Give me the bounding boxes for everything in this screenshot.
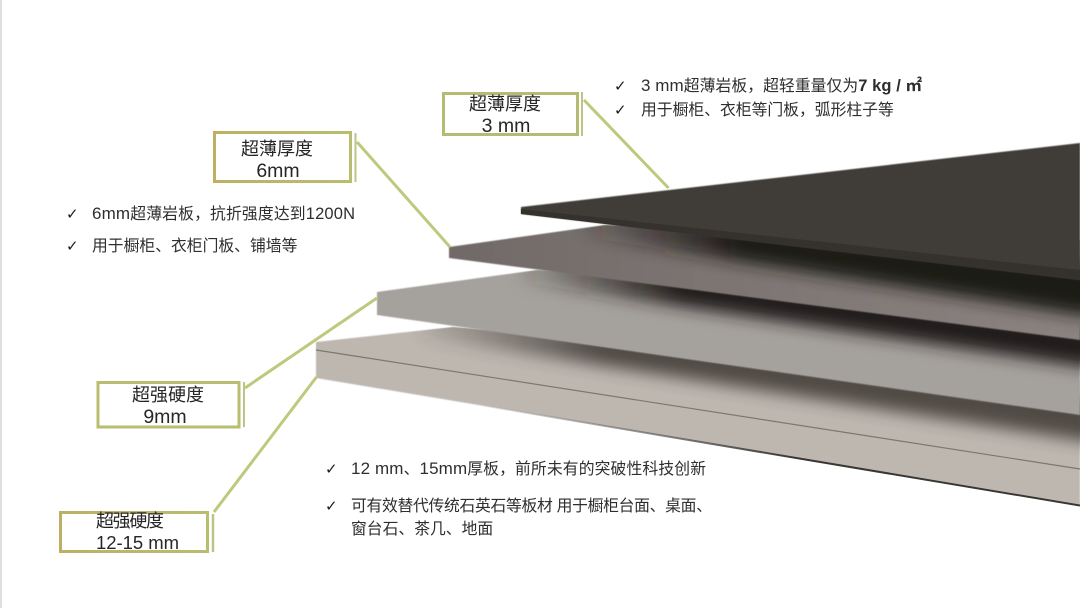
label: 6mm: 超薄厚度 — [241, 139, 313, 159]
label: 12-15 mm — [60, 511, 213, 553]
text block: 3 mm notes — [614, 76, 922, 119]
text block: 3 mm notes: ✓ — [614, 101, 627, 119]
label: 9mm: 超强硬度 — [132, 385, 204, 405]
slab illustration: four stacked panels — [316, 143, 1080, 506]
label: 12-15 mm: 超强硬度 — [96, 511, 164, 531]
label: 3 mm: 3 mm — [482, 115, 530, 137]
label: 12-15 mm: 12-15 mm — [96, 532, 179, 553]
text block: 12-15 mm notes: ✓ — [325, 497, 338, 515]
slab: 3 mm panel — [521, 143, 1080, 280]
text block: 6 mm notes: ✓ — [66, 205, 79, 223]
text block: 3 mm notes: 3 mm超薄岩板，超轻重量仅为7 kg / ㎡ — [641, 76, 922, 95]
text block: 3 mm notes: 用于橱柜、衣柜等门板，弧形柱子等 — [641, 101, 894, 119]
text block: 6 mm notes — [66, 204, 355, 255]
text block: 3 mm notes: ✓ — [614, 77, 627, 95]
callout line: 6 mm — [357, 142, 450, 247]
callout line: 9 mm — [245, 298, 377, 388]
text block: 12-15 mm notes: ✓ — [325, 460, 338, 478]
text block: 6 mm notes: 用于橱柜、衣柜门板、铺墙等 — [92, 237, 298, 255]
text block: 12-15 mm notes: 12 mm、15mm厚板，前所未有的突破性科技创新 — [351, 459, 706, 478]
callout line: 12-15 mm — [214, 377, 316, 512]
label: 9mm: 9mm — [143, 406, 187, 428]
slab: 6 mm panel — [448, 224, 1080, 340]
text block: 12-15 mm notes — [325, 459, 712, 538]
text block: 12-15 mm notes: 窗台石、茶几、地面 — [351, 520, 493, 538]
text block: 12-15 mm notes: 可有效替代传统石英石等板材 用于橱柜台面、桌面、 — [351, 497, 712, 515]
text block: 6 mm notes: ✓ — [66, 237, 79, 255]
left edge strip — [0, 0, 2, 608]
label: 6mm — [214, 132, 356, 182]
label: 3 mm: 超薄厚度 — [469, 94, 541, 114]
label: 9mm — [98, 382, 244, 428]
text block: 6 mm notes: 6mm超薄岩板，抗折强度达到1200N — [92, 204, 355, 223]
slab: 9 mm panel — [376, 270, 1080, 416]
slab: 12-15 mm panel — [316, 307, 1080, 506]
label: 6mm: 6mm — [256, 160, 300, 182]
callout line: 3 mm — [584, 100, 668, 188]
label: 3 mm — [444, 92, 582, 137]
